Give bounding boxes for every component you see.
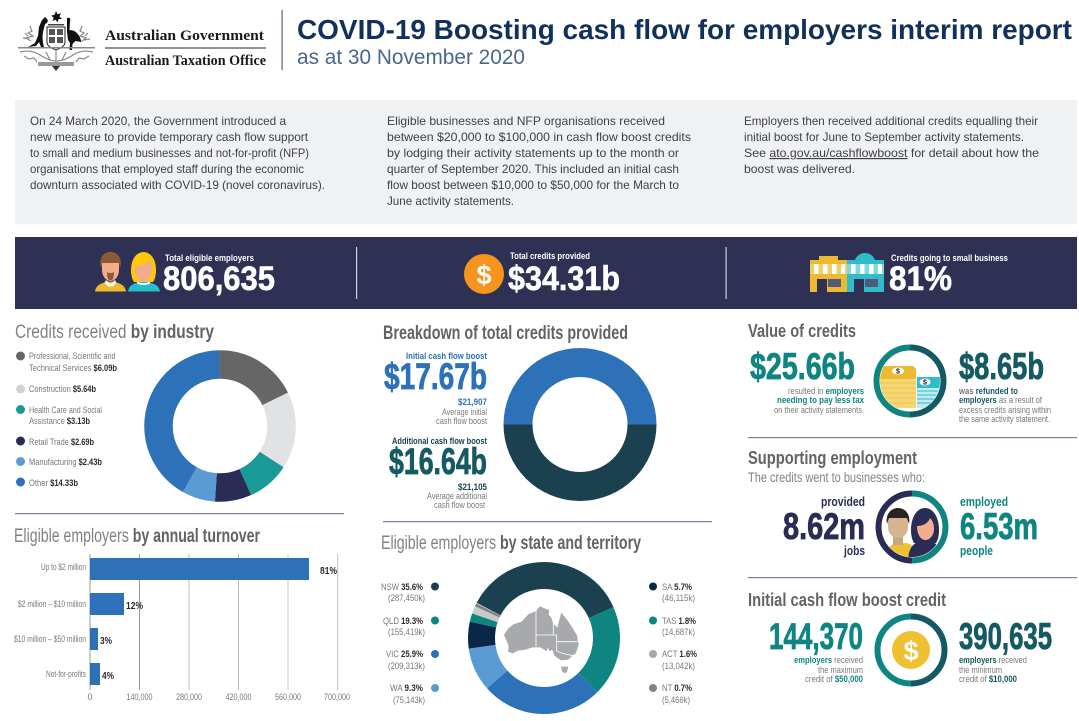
text: Australian Taxation Office: Australian Taxation Office xyxy=(105,53,267,69)
text block: column two: by lodging their activity statements up to the month or xyxy=(387,147,679,160)
stat: additional cash flow boost: $21,105 xyxy=(458,482,488,493)
text block: column two: between $20,000 to $100,000 in cash flow boost credits xyxy=(387,131,691,144)
legend: left states: NSW 35.6% xyxy=(381,582,423,593)
legend: right states: (5,466k) xyxy=(662,695,690,706)
heading: Initial cash flow boost credit xyxy=(748,589,946,610)
text block: column one: organisations that employed staff during the economic xyxy=(30,163,304,176)
legend: right states xyxy=(649,582,697,706)
stat: jobs provided: 8.62m xyxy=(783,506,865,547)
text block: column one xyxy=(30,115,325,192)
text block: column two xyxy=(387,115,691,208)
stat: refunded xyxy=(958,346,1051,425)
bar chart: turnover: 420,000 xyxy=(226,692,252,702)
stat: minimum credit: employers received xyxy=(959,655,1027,666)
legend: right states: TAS 1.8% xyxy=(662,616,696,627)
legend: left states: VIC 25.9% xyxy=(386,649,423,660)
stat: additional cash flow boost xyxy=(389,436,488,511)
bar chart: turnover: 4% xyxy=(102,671,114,682)
title: COVID-19 Boosting cash flow for employers interim report xyxy=(297,14,1072,45)
stat: total credits provided: Total credits provided xyxy=(510,251,590,262)
stat: total credits provided: $34.31b xyxy=(508,260,620,298)
bar chart: turnover: Not-for-profits xyxy=(46,669,86,679)
legend: right states: (46,115k) xyxy=(662,593,695,604)
stat: refunded: employers as a result of xyxy=(959,395,1042,406)
legend: Assistance $3.13b xyxy=(29,416,90,427)
icon: Australian coat of arms xyxy=(18,11,95,71)
heading: Eligible employers by annual turnover xyxy=(14,526,260,547)
stat: additional cash flow boost: cash flow boost xyxy=(434,500,485,511)
stat: refunded: was refunded to xyxy=(958,386,1018,397)
legend: Other $14.33b xyxy=(29,478,78,489)
stat: people employed: 6.53m xyxy=(960,506,1038,547)
panel: supporting employment xyxy=(748,447,1038,562)
stat: people employed: people xyxy=(960,544,993,558)
bar chart: turnover: Up to $2 million xyxy=(41,562,86,572)
stat: jobs provided xyxy=(783,495,865,558)
legend: Health Care and Social xyxy=(29,405,102,416)
bar chart: turnover xyxy=(14,554,350,702)
legend: Retail Trade $2.69b xyxy=(29,437,94,448)
subtitle: as at 30 November 2020 xyxy=(297,46,525,69)
stat: people employed xyxy=(960,495,1038,558)
panel: initial cash flow boost credit xyxy=(748,589,1052,685)
stat: less tax: resulted in employers xyxy=(788,386,864,397)
panel: introduction xyxy=(15,100,1077,224)
stat: total eligible employers: Total eligible employers xyxy=(165,253,254,264)
legend: Professional, Scientific and xyxy=(29,351,116,362)
stat: refunded: the same activity statement. xyxy=(959,414,1050,425)
stat: initial cash flow boost: Average initial xyxy=(442,407,487,418)
stat: credits going to small business: 81% xyxy=(889,260,952,298)
legend: left states: (287,450k) xyxy=(388,593,425,604)
bar chart: turnover: 560,000 xyxy=(275,692,301,702)
stat: jobs provided: provided xyxy=(821,495,865,509)
legend: Manufacturing $2.43b xyxy=(29,457,102,468)
bar chart: turnover: 700,000 xyxy=(324,692,350,702)
icon: map of Australia xyxy=(504,606,579,673)
text block: column three: See ato.gov.au/cashflowboost for detail about how the xyxy=(744,147,1039,160)
donut chart: credit breakdown xyxy=(504,348,656,501)
legend: right states: ACT 1.6% xyxy=(662,649,697,660)
stat: minimum credit xyxy=(959,616,1052,685)
stat: maximum credit: employers received xyxy=(794,655,863,666)
text block: column two: flow boost between $10,000 to $50,000 for the March to xyxy=(387,179,679,192)
stat: credits going to small business: Credits going to small business xyxy=(891,253,1008,264)
stat: maximum credit xyxy=(769,616,863,685)
header: government branding xyxy=(18,11,267,71)
bar chart: turnover: 81% xyxy=(320,566,337,577)
panel: eligible employers by annual turnover xyxy=(14,526,350,702)
text block: column one: On 24 March 2020, the Government introduced a xyxy=(30,115,287,128)
stat: initial cash flow boost: cash flow boost xyxy=(436,416,487,427)
stat: refunded: $8.65b xyxy=(959,346,1044,387)
panel: breakdown of total credits provided xyxy=(383,323,656,511)
panel: credits received by industry xyxy=(15,322,282,489)
text block: column three: Employers then received additional credits equalling their xyxy=(744,115,1038,128)
icon: money stacks ring: $ xyxy=(896,368,900,376)
icon: coin ring: $ xyxy=(903,636,919,666)
legend: right states: NT 0.7% xyxy=(662,683,692,694)
stat: people employed: employed xyxy=(960,495,1008,509)
legend: Construction $5.64b xyxy=(29,384,96,395)
stat: jobs provided: jobs xyxy=(843,544,865,558)
text block: column one: new measure to provide temporary cash flow support xyxy=(30,131,309,144)
legend: right states: (13,042k) xyxy=(662,661,695,672)
legend: right states: (14,687k) xyxy=(662,627,695,638)
icon: small business shops xyxy=(810,253,884,292)
stat: minimum credit: credit of $10,000 xyxy=(959,674,1017,685)
text block: column three xyxy=(744,115,1039,176)
heading: Breakdown of total credits provided xyxy=(383,323,628,344)
bar chart: turnover: $10 million – $50 million xyxy=(14,634,86,644)
icon: money stacks ring xyxy=(876,348,944,414)
legend: left states: QLD 19.3% xyxy=(383,616,423,627)
stat: initial cash flow boost xyxy=(384,351,488,427)
heading: Value of credits xyxy=(748,320,856,341)
stat: total eligible employers: 806,635 xyxy=(163,260,275,298)
text block: column two: Eligible businesses and NFP organisations received xyxy=(387,115,665,128)
stat: maximum credit: credit of $50,000 xyxy=(805,674,863,685)
text block: column two: quarter of September 2020. This included an initial cash xyxy=(387,163,679,176)
text block: column one: to small and medium businesses and not-for-profit (NFP) xyxy=(30,147,309,160)
legend: right states: SA 5.7% xyxy=(662,582,692,593)
legend: Technical Services $6.09b xyxy=(29,363,117,374)
subheading: The credits went to businesses who: xyxy=(748,470,925,485)
legend xyxy=(16,351,117,489)
stat: maximum credit: 144,370 xyxy=(769,616,863,657)
stat: maximum credit: the maximum xyxy=(818,665,863,676)
bar chart: turnover: 12% xyxy=(126,601,143,612)
stat: additional cash flow boost: $16.64b xyxy=(389,441,487,482)
donut chart: industry xyxy=(158,364,282,488)
stat: additional cash flow boost: Average additional xyxy=(427,491,487,502)
stat: less tax xyxy=(750,346,865,416)
icon: money stacks ring: $ xyxy=(923,380,927,386)
bar chart: turnover: 140,000 xyxy=(126,692,152,702)
legend: left states: WA 9.3% xyxy=(390,683,423,694)
icon: employers man and woman xyxy=(95,252,160,292)
bar chart: turnover: 280,000 xyxy=(176,692,202,702)
heading: Eligible employers by state and territory xyxy=(381,533,641,554)
panel: headline statistics banner xyxy=(15,237,1077,309)
stat: refunded: excess credits arising within xyxy=(959,405,1051,416)
panel: eligible employers by state and territory xyxy=(381,533,697,721)
stat: initial cash flow boost: $21,907 xyxy=(458,397,487,408)
bar chart: turnover: 3% xyxy=(100,636,112,647)
stat: less tax: $25.66b xyxy=(750,346,855,387)
icon: workers ring xyxy=(879,494,945,562)
text: Australian Government: Australian Government xyxy=(105,28,264,44)
stat: credits going to small business xyxy=(889,253,1008,298)
legend: left states: (155,419k) xyxy=(388,627,425,638)
text block: column two: June activity statements. xyxy=(387,195,514,208)
bar chart: turnover: $2 million – $10 million xyxy=(18,599,86,609)
bar chart: turnover: 0 xyxy=(87,692,93,702)
legend: left states: (209,313k) xyxy=(388,661,425,672)
stat: less tax: needing to pay less tax xyxy=(777,395,865,406)
stat: minimum credit: the minimum xyxy=(959,665,1002,676)
stat: additional cash flow boost: Additional cash flow boost xyxy=(392,436,488,447)
icon: coin ring xyxy=(877,616,944,684)
stat: less tax: on their activity statements. xyxy=(774,405,864,416)
donut chart: states and territories xyxy=(459,553,629,721)
text block: column three: initial boost for June to September activity statements. xyxy=(744,131,1024,144)
legend: left states: (75,143k) xyxy=(393,695,425,706)
text block: column one: downturn associated with COVID-19 (novel coronavirus). xyxy=(30,179,325,192)
stat: initial cash flow boost: $17.67b xyxy=(384,356,487,397)
icon: dollar coin: $ xyxy=(476,260,492,290)
heading: Supporting employment xyxy=(748,447,917,468)
legend: left states xyxy=(381,582,439,706)
heading: Credits received by industry xyxy=(15,322,214,343)
text block: column three: boost was delivered. xyxy=(744,163,855,176)
panel: value of credits xyxy=(748,320,1051,425)
icon: dollar coin xyxy=(464,254,504,294)
stat: initial cash flow boost: Initial cash flow boost xyxy=(406,351,488,362)
